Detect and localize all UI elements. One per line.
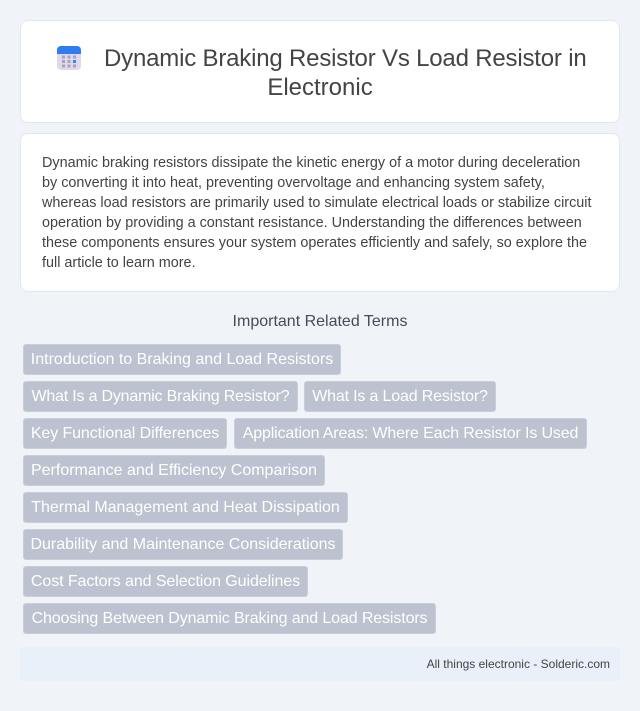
title: Electronic: [267, 74, 373, 101]
tag: Key Functional Differences: [31, 425, 219, 442]
heading: important related terms: Important Related Terms: [233, 313, 407, 330]
tag: [23, 381, 298, 412]
summary text: operation by providing a constant resistance. Understanding the differences between: [42, 215, 582, 231]
tag: Durability and Maintenance Considerations: [30, 536, 336, 553]
summary text: Dynamic braking resistors dissipate the kinetic energy of a motor during deceleration: [42, 155, 580, 171]
summary text: [42, 155, 592, 271]
summary text: these components ensures your system operates efficiently and safely, so explore the: [42, 235, 587, 251]
panel: title card: [20, 20, 620, 123]
tag: Application Areas: Where Each Resistor Is Used: [243, 425, 578, 442]
tag: [23, 566, 308, 597]
title: Dynamic Braking Resistor Vs Load Resistor in: [104, 45, 586, 72]
footer text: All things electronic - Solderic.com: [427, 657, 610, 671]
tag: Thermal Management and Heat Dissipation: [31, 499, 340, 516]
title: [104, 45, 586, 101]
tag: [23, 418, 227, 449]
summary text: full article to learn more.: [42, 255, 196, 271]
tag: [23, 603, 436, 634]
summary text: whereas load resistors are primarily used to simulate electrical loads or stabilize circuit: [42, 195, 591, 211]
summary text: by converting it into heat, preventing overvoltage and enhancing system safety,: [42, 175, 545, 191]
tag: Performance and Efficiency Comparison: [31, 462, 317, 479]
tag: [234, 418, 587, 449]
icon: calendar: [57, 46, 81, 70]
tag: Introduction to Braking and Load Resistors: [31, 351, 333, 368]
tag: [23, 344, 341, 375]
tag: What Is a Dynamic Braking Resistor?: [32, 388, 289, 405]
tag: What Is a Load Resistor?: [312, 388, 488, 405]
tag: Cost Factors and Selection Guidelines: [31, 573, 300, 590]
panel: summary card: [20, 133, 620, 292]
footer: [20, 647, 620, 681]
tag: [304, 381, 496, 412]
tag: Choosing Between Dynamic Braking and Load Resistors: [32, 610, 427, 627]
tag: [23, 492, 348, 523]
tag: [23, 455, 325, 486]
tag: [23, 529, 343, 560]
